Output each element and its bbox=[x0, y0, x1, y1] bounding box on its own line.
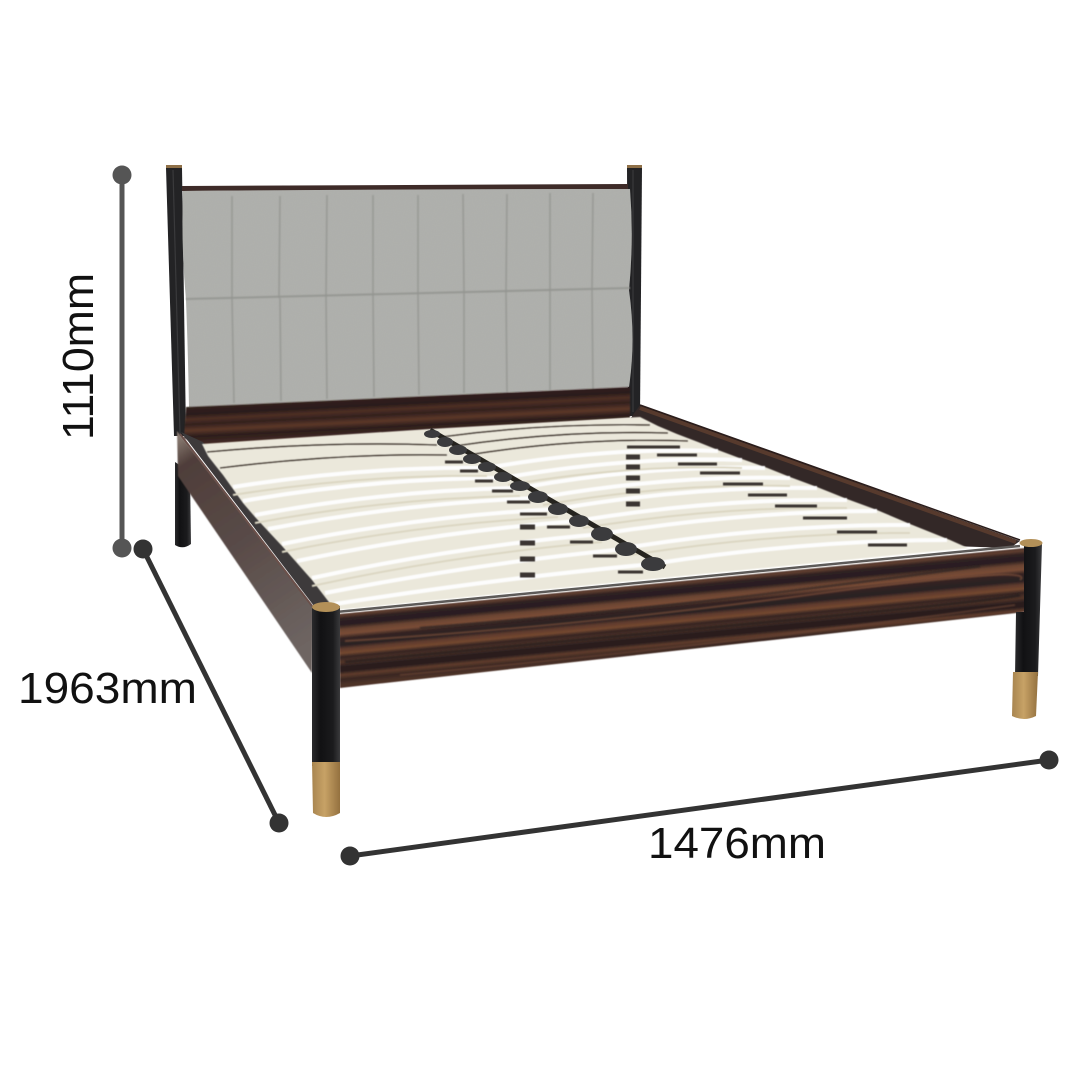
slat shading bbox=[233, 467, 910, 586]
headboard top rail bbox=[182, 184, 628, 191]
panel tufting seams bbox=[186, 193, 630, 403]
width dimension bbox=[340, 750, 1058, 868]
dark gaps between rear slats bbox=[207, 425, 688, 468]
front right leg bbox=[1012, 539, 1042, 719]
left side rail bbox=[177, 431, 338, 673]
height dimension bbox=[54, 166, 132, 558]
center strap with pads bbox=[424, 430, 665, 571]
upholstered headboard panel bbox=[182, 189, 632, 407]
length dimension bbox=[18, 540, 288, 832]
rear left leg bbox=[175, 462, 191, 547]
cream slat bed bbox=[202, 417, 968, 610]
slat support bars bbox=[445, 447, 907, 575]
right side rail bbox=[628, 405, 1020, 548]
length label: 1963mm bbox=[18, 664, 197, 713]
height label: 1110mm bbox=[54, 273, 103, 440]
wood grain bbox=[345, 566, 1022, 675]
headboard wood band bbox=[184, 387, 630, 448]
slat highlights bbox=[233, 450, 947, 604]
wooden slats bbox=[202, 417, 968, 610]
front rail bbox=[336, 546, 1025, 688]
left headboard post bbox=[166, 165, 186, 436]
front left leg bbox=[312, 602, 340, 817]
bed bbox=[166, 165, 1042, 817]
right headboard post bbox=[627, 165, 642, 416]
width label: 1476mm bbox=[648, 819, 826, 868]
